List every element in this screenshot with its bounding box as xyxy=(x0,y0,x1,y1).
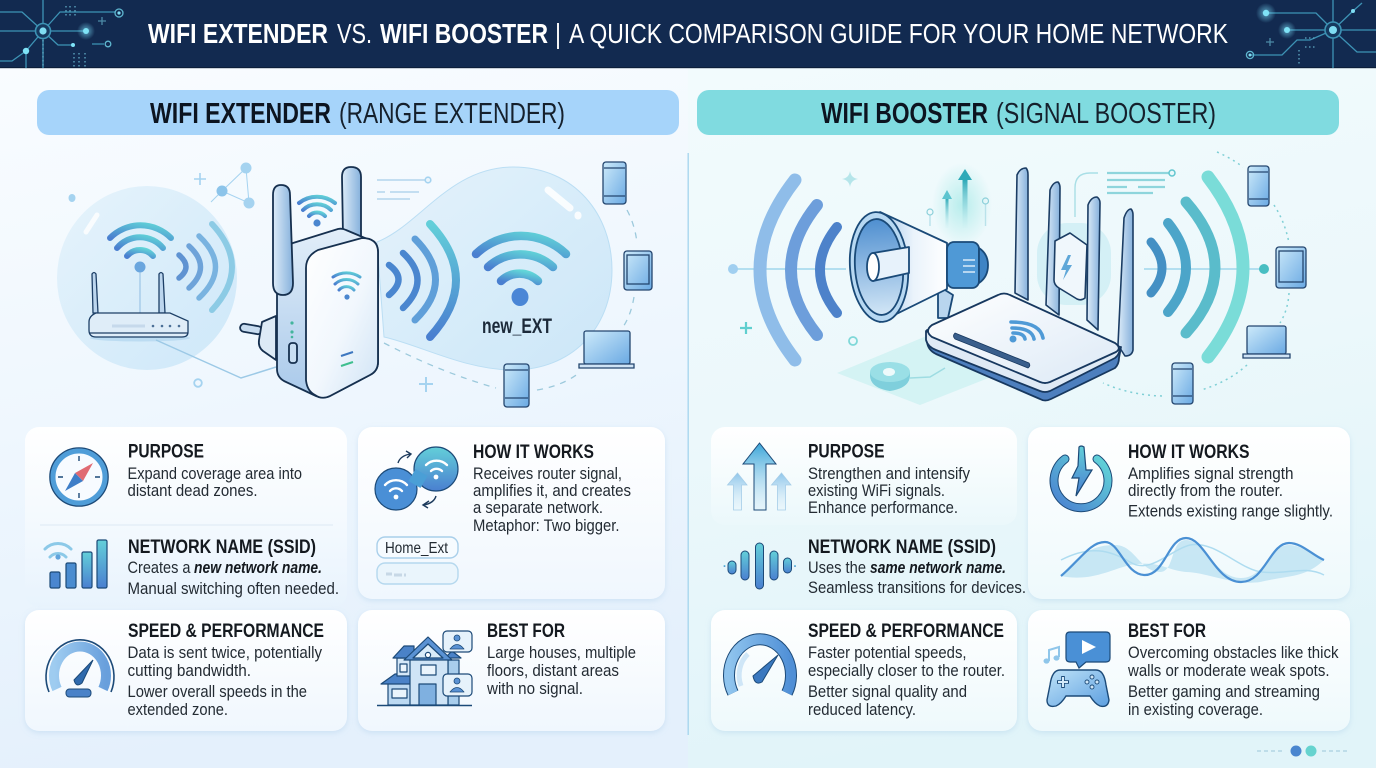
text: purpose body: distant dead zones. xyxy=(128,482,258,500)
text: best for body xyxy=(486,644,636,698)
panel: extender speed and performance xyxy=(25,610,347,731)
text: speed body xyxy=(808,644,1005,719)
connected devices xyxy=(1172,166,1306,404)
icon: phone xyxy=(1248,166,1269,206)
heading: purpose: PURPOSE xyxy=(808,440,884,462)
heading: purpose: PURPOSE xyxy=(128,440,204,462)
heading: wifi extender: (RANGE EXTENDER) xyxy=(339,98,565,130)
footer pagination dots xyxy=(1257,746,1350,756)
panel: booster speed and performance xyxy=(711,610,1017,731)
panel: extender best for xyxy=(358,610,665,731)
heading: speed: SPEED & PERFORMANCE xyxy=(808,620,1004,642)
panel: extender purpose and network name xyxy=(25,427,347,607)
icon: compass xyxy=(50,448,108,506)
router xyxy=(926,294,1121,400)
heading: wifi booster xyxy=(697,90,1339,135)
router xyxy=(89,272,190,342)
text: best for body: floors, distant areas xyxy=(487,662,619,680)
icon: power bolt xyxy=(1054,446,1108,508)
text: network name body: Uses the xyxy=(808,559,866,577)
text: best for body: Large houses, multiple xyxy=(487,644,636,662)
text: network name body: Manual switching often needed. xyxy=(128,580,339,598)
wifi on device face xyxy=(333,273,360,300)
text: how it works body: amplifies it, and creates xyxy=(473,482,631,500)
icon: game controller and video xyxy=(1044,632,1110,706)
background: right half xyxy=(688,68,1376,768)
heading: wifi booster: WIFI BOOSTER xyxy=(821,98,988,130)
extended signal waves xyxy=(389,224,456,337)
network name: new_EXT xyxy=(482,315,552,338)
plane and puck xyxy=(837,335,991,405)
circuit decoration left xyxy=(0,0,123,68)
wifi symbol xyxy=(110,225,171,313)
header banner xyxy=(0,0,1376,68)
text: best for body xyxy=(1127,644,1339,719)
icon: waveform xyxy=(724,543,796,589)
panel: booster best for xyxy=(1028,610,1350,731)
text: speed body: Lower overall speeds in the xyxy=(128,683,307,701)
booster module xyxy=(1054,233,1087,300)
text: network name body: Creates a xyxy=(128,559,191,577)
axis lines xyxy=(728,264,1269,274)
illustration: wifi extender xyxy=(57,162,652,407)
text: how it works body xyxy=(473,465,631,535)
text: best for body: in existing coverage. xyxy=(1128,701,1263,719)
text: how it works body: Amplifies signal strength xyxy=(1128,465,1294,483)
icon: phone xyxy=(1172,363,1193,404)
title: VS. xyxy=(337,18,372,49)
text: network name body: new network name. xyxy=(194,559,322,577)
panel: booster how it works xyxy=(1028,427,1350,599)
title: WIFI EXTENDER xyxy=(148,18,328,49)
text: speed body: Faster potential speeds, xyxy=(808,644,966,662)
heading: wifi extender xyxy=(37,90,679,135)
icon: gauge xyxy=(729,639,791,693)
text: speed body: reduced latency. xyxy=(808,701,916,719)
text: purpose body: Enhance performance. xyxy=(808,499,958,517)
circuit decoration right xyxy=(1246,0,1376,68)
icon: up arrows xyxy=(728,443,791,510)
title: WIFI BOOSTER xyxy=(380,18,548,49)
text: best for body: Overcoming obstacles like thick xyxy=(1128,644,1339,662)
text: best for body: Better gaming and streaming xyxy=(1128,683,1320,701)
heading: wifi booster: (SIGNAL BOOSTER) xyxy=(996,98,1216,130)
panel: booster purpose and network name xyxy=(711,427,1026,597)
text: best for body: with no signal. xyxy=(486,680,583,698)
text: how it works body: a separate network. xyxy=(473,499,603,517)
text: speed body: especially closer to the router. xyxy=(808,662,1005,680)
text: speed body: Data is sent twice, potentially xyxy=(128,644,323,662)
heading: network name: NETWORK NAME (SSID) xyxy=(808,536,996,558)
decoration xyxy=(740,163,1175,345)
heading: wifi extender: WIFI EXTENDER xyxy=(150,98,331,130)
small wifi above device xyxy=(299,197,335,227)
text: how it works body: Extends existing range slightly. xyxy=(1128,502,1333,520)
text: how it works body: Metaphor: Two bigger. xyxy=(473,517,620,535)
text: network name body xyxy=(128,559,339,598)
glow behind booster module xyxy=(1037,223,1111,305)
text: purpose body: Expand coverage area into xyxy=(128,465,302,483)
signal waves xyxy=(179,224,232,310)
title: A QUICK COMPARISON GUIDE FOR YOUR HOME NETWORK xyxy=(569,18,1228,49)
heading: best for: BEST FOR xyxy=(1128,620,1206,642)
source bubble with router xyxy=(57,186,237,370)
text: speed body xyxy=(128,644,323,719)
heading: network name: NETWORK NAME (SSID) xyxy=(128,536,316,558)
text: purpose body: Strengthen and intensify xyxy=(808,465,971,483)
icon: phone xyxy=(504,364,529,407)
icon: tablet xyxy=(1276,247,1306,288)
panel: extender how it works xyxy=(358,427,665,599)
text: best for body: walls or moderate weak spots. xyxy=(1127,662,1330,680)
heading: how it works: HOW IT WORKS xyxy=(1128,441,1250,463)
decorative network nodes xyxy=(68,162,433,392)
dotted connections xyxy=(1103,152,1289,396)
text: speed body: extended zone. xyxy=(128,701,228,719)
connected devices xyxy=(504,162,652,407)
text: network name body: same network name. xyxy=(870,559,1006,577)
wifi extender device xyxy=(239,167,378,398)
big wifi symbol xyxy=(476,236,566,306)
icon: tablet xyxy=(624,251,652,290)
text: purpose body xyxy=(128,465,302,500)
icon: two linked networks xyxy=(375,447,458,510)
text: purpose body: existing WiFi signals. xyxy=(808,482,945,500)
pill: blurred placeholder xyxy=(377,563,458,584)
text: purpose body xyxy=(808,465,971,517)
icon: laptop xyxy=(1243,326,1290,358)
icon: laptop xyxy=(579,331,634,368)
text: speed body: cutting bandwidth. xyxy=(128,662,251,680)
waves right xyxy=(1151,177,1243,357)
title xyxy=(148,18,1228,49)
wifi on router xyxy=(1010,322,1043,342)
heading: how it works: HOW IT WORKS xyxy=(473,441,594,463)
signal wave graphic xyxy=(1061,538,1324,583)
text: how it works body: directly from the router. xyxy=(1128,482,1283,500)
dashed connections xyxy=(384,210,637,390)
icon: phone xyxy=(603,162,626,204)
target coverage bubble xyxy=(377,167,612,370)
waves left xyxy=(760,180,837,360)
heading: speed: SPEED & PERFORMANCE xyxy=(128,620,324,642)
text: network name body: Seamless transitions for devices. xyxy=(808,579,1026,597)
illustration: wifi booster xyxy=(728,152,1306,405)
text: speed body: Better signal quality and xyxy=(808,683,967,701)
megaphone xyxy=(846,210,988,324)
text: network name body xyxy=(808,559,1026,597)
icon: signal bars with wifi xyxy=(45,540,107,588)
heading: best for: BEST FOR xyxy=(487,620,565,642)
icon: gauge xyxy=(46,640,114,697)
text: how it works body: Receives router signal, xyxy=(473,465,622,483)
antennas xyxy=(1015,168,1133,356)
icon: house xyxy=(377,631,472,706)
text: how it works body xyxy=(1128,465,1333,520)
cable xyxy=(156,340,276,378)
background: left half xyxy=(0,68,688,768)
pill: home_ext: Home_Ext xyxy=(385,540,449,557)
title: | xyxy=(555,18,561,49)
